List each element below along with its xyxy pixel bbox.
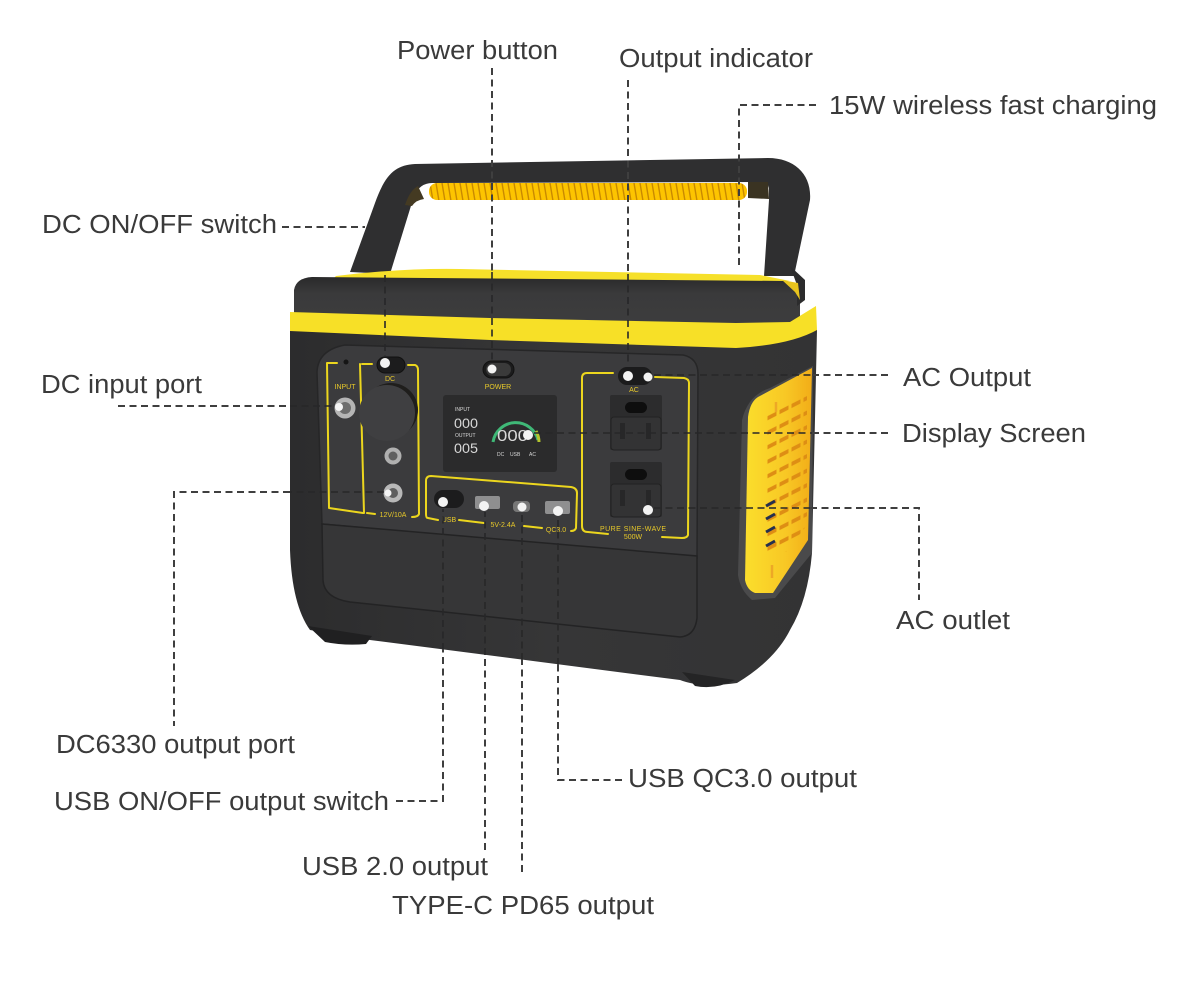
label: USB 2.0 output: USB 2.0 output (302, 853, 488, 881)
USB-C port (513, 501, 530, 512)
upper lid (294, 277, 800, 325)
label: DC input port: DC input port (41, 371, 202, 399)
label: Output indicator: Output indicator (619, 45, 814, 73)
label: DC ON/OFF switch: DC ON/OFF switch (42, 211, 277, 239)
leader: Type-C (521, 513, 523, 872)
USB frame: QC3.0 (546, 527, 566, 534)
label: USB ON/OFF output switch: USB ON/OFF output switch (54, 788, 389, 816)
leader: power button (491, 68, 493, 360)
AC outlet lower (610, 462, 662, 517)
leader: wireless charging (739, 105, 816, 266)
power button: POWER (485, 384, 511, 391)
DC input port connector (334, 398, 356, 418)
USB frame: 5V-2.4A (491, 522, 516, 529)
DC6330 port lower (384, 484, 402, 502)
leader: AC output (654, 374, 890, 376)
leader: DC input (118, 405, 334, 407)
leader: display screen (534, 432, 890, 434)
AC frame: AC (629, 387, 639, 394)
display screen: USB (510, 452, 521, 458)
leader: output indicator (627, 80, 629, 366)
display screen: 000 (454, 415, 478, 431)
lower storage panel (322, 524, 697, 637)
handle grip (429, 183, 747, 200)
label: 15W wireless fast charging: 15W wireless fast charging (829, 92, 1157, 120)
main body (290, 330, 817, 685)
DC6330 port upper (384, 448, 402, 464)
USB 2.0 port (475, 496, 500, 509)
label: Power button: Power button (397, 37, 558, 65)
product: portable power station (290, 158, 817, 687)
leader: DC switch (282, 227, 385, 356)
side vent panel (738, 366, 813, 600)
yellow band (290, 306, 817, 348)
display screen: AC (529, 452, 536, 458)
label: USB QC3.0 output: USB QC3.0 output (628, 765, 857, 793)
feet (308, 626, 372, 645)
AC frame (582, 367, 689, 541)
DC frame: DC (385, 376, 395, 383)
AC frame: 500W (624, 534, 643, 541)
handle (350, 158, 810, 276)
display gauge (493, 423, 538, 442)
display screen: INPUT (455, 407, 470, 413)
input frame: INPUT (334, 384, 356, 391)
leader: USB QC3.0 (558, 517, 622, 780)
display screen: 000 (497, 428, 528, 445)
label: TYPE-C PD65 output: TYPE-C PD65 output (392, 892, 654, 920)
AC frame: PURE SINE-WAVE (600, 526, 666, 533)
DC frame: 12V/10A (380, 512, 407, 519)
label: DC6330 output port: DC6330 output port (56, 731, 295, 759)
AC outlet upper (610, 395, 662, 450)
USB frame (426, 476, 577, 534)
USB frame: USB (442, 517, 457, 524)
leader: DC6330 (174, 492, 384, 726)
label: AC Output: AC Output (903, 364, 1031, 392)
display screen: OUTPUT (455, 433, 476, 439)
display screen: DC (497, 452, 505, 458)
input frame (327, 360, 364, 513)
leader: AC outlet (654, 508, 919, 600)
power button (483, 361, 514, 391)
control panel (317, 345, 698, 558)
display screen: 005 (454, 440, 478, 456)
leader: USB 2.0 (484, 512, 486, 850)
label: AC outlet: AC outlet (896, 607, 1010, 635)
DC switch (377, 357, 405, 373)
label: Display Screen: Display Screen (902, 420, 1086, 448)
leader: USB switch (396, 509, 443, 801)
DC frame (359, 357, 419, 519)
AC switch (618, 367, 652, 385)
USB QC3.0 port (545, 501, 570, 514)
display screen (443, 395, 557, 472)
DC cigarette socket cap (359, 383, 418, 441)
lid top yellow (330, 269, 790, 282)
USB switch (434, 490, 464, 508)
